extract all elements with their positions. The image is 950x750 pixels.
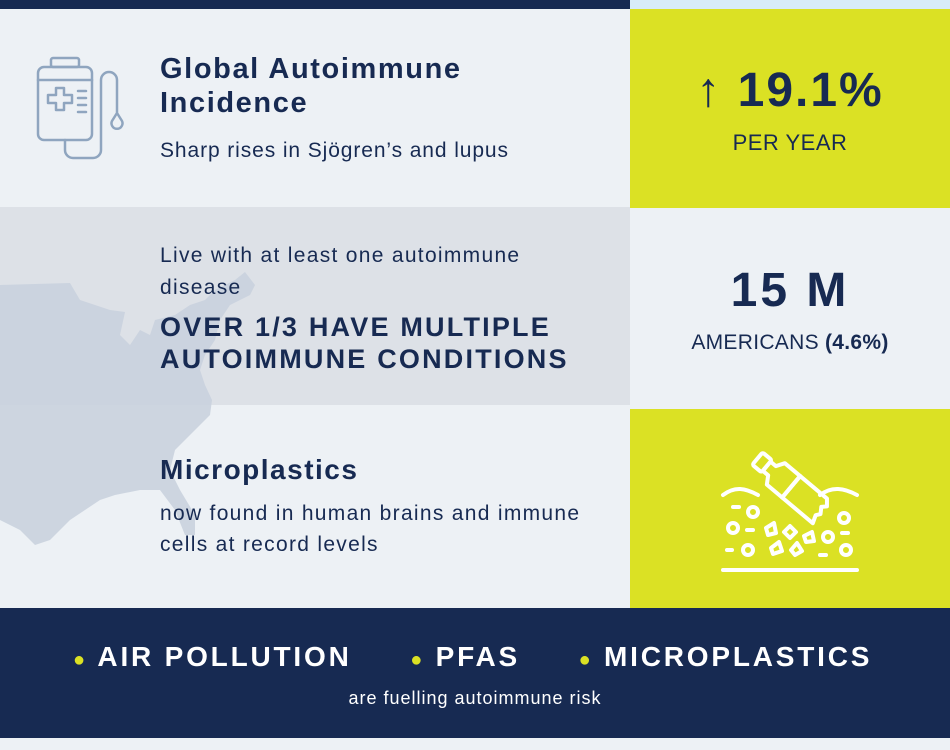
heading: Global Autoimmune xyxy=(160,53,462,85)
bullet list: ● AIR POLLUTION ● PFAS ● MICROPLASTICS xyxy=(73,641,872,672)
panel: microplastics: now found in human brains and immune xyxy=(160,502,580,525)
stat: 15 M: AMERICANS (4.6%) xyxy=(691,331,889,354)
stat: 19.1%: ↑ 19.1% xyxy=(696,64,884,117)
top bar xyxy=(0,0,630,9)
icon: IV bag xyxy=(36,56,124,160)
panel: microplastics: Microplastics xyxy=(160,454,358,485)
panel: Americans xyxy=(160,244,569,374)
stat: 15 M: 15 M xyxy=(731,264,849,317)
panel: Americans: Live with at least one autoimmune xyxy=(160,244,520,267)
panel: microplastics: cells at record levels xyxy=(160,533,379,556)
heading: Incidence xyxy=(160,87,308,119)
emphasis xyxy=(160,312,569,374)
text: Sharp rises in Sjögren’s and lupus xyxy=(160,139,509,162)
row 2 background band xyxy=(0,207,630,405)
panel: microplastics xyxy=(160,454,580,556)
icon: microplastics bottle xyxy=(630,409,950,608)
stat: 15 M xyxy=(691,264,889,354)
heading xyxy=(160,53,462,119)
caption: are fuelling autoimmune risk xyxy=(348,688,602,708)
banner: risk factors xyxy=(0,608,950,738)
panel: Americans: disease xyxy=(160,276,241,299)
map: USA silhouette xyxy=(0,272,255,545)
stat: 19.1%: PER YEAR xyxy=(733,130,847,155)
stat: 19.1% xyxy=(630,9,950,208)
panel: global incidence xyxy=(36,53,509,162)
emphasis: OVER 1/3 HAVE MULTIPLE xyxy=(160,312,551,342)
emphasis: AUTOIMMUNE CONDITIONS xyxy=(160,344,569,374)
